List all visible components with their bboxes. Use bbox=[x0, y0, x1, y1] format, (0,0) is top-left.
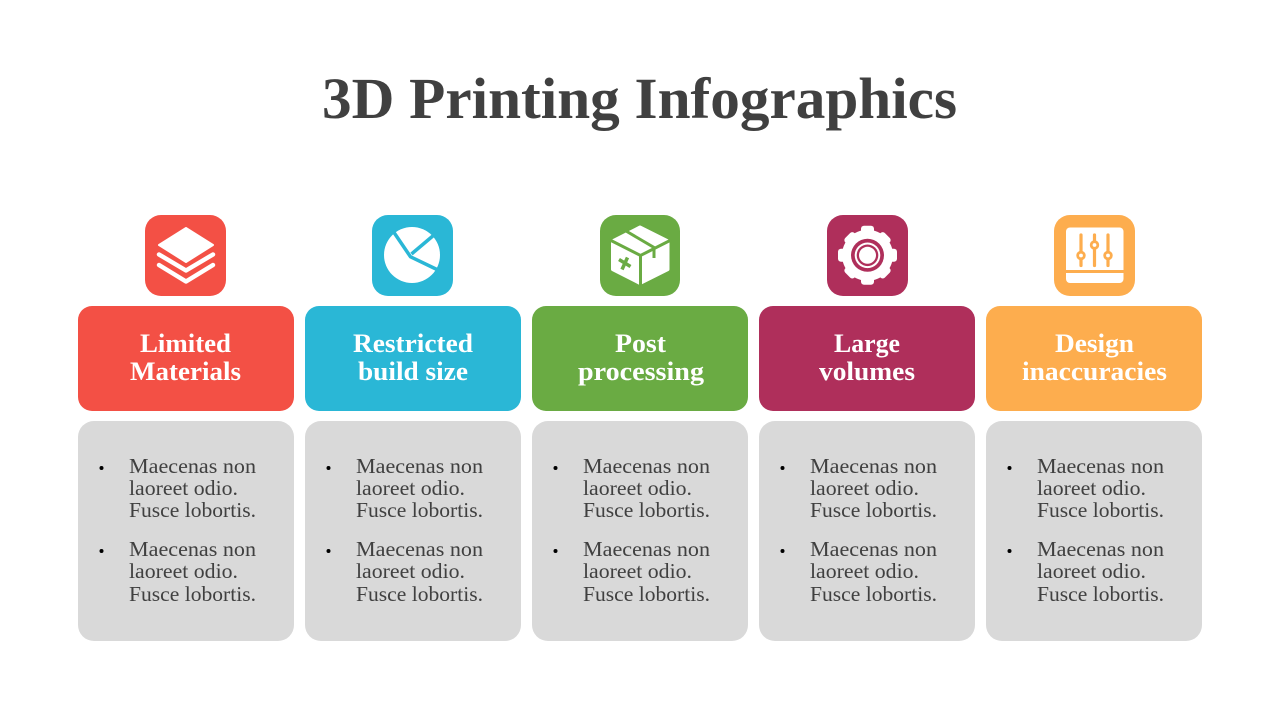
text panel: Limited Materials bbox=[78, 421, 294, 641]
text panel: Post processing: Fusce lobortis. bbox=[583, 582, 710, 606]
heading panel: Design inaccuracies: Design bbox=[1055, 329, 1135, 358]
column: Design inaccuracies bbox=[986, 215, 1202, 641]
heading panel: Restricted build size bbox=[305, 306, 521, 411]
text panel: Limited Materials: Fusce lobortis. bbox=[129, 582, 256, 606]
text panel: Restricted build size: laoreet odio. bbox=[356, 476, 465, 500]
text panel: Post processing: laoreet odio. bbox=[583, 559, 692, 583]
heading panel: Limited Materials bbox=[78, 306, 294, 411]
icon: box bbox=[600, 215, 680, 296]
icon: layers bbox=[145, 215, 226, 296]
heading panel: Design inaccuracies bbox=[986, 306, 1202, 411]
text panel: Design inaccuracies: Maecenas non bbox=[1037, 454, 1165, 478]
column: Post processing bbox=[532, 215, 748, 641]
text panel: Design inaccuracies: Fusce lobortis. bbox=[1037, 582, 1164, 606]
heading panel: Post processing: processing bbox=[578, 357, 704, 386]
text panel: Post processing: Maecenas non bbox=[583, 537, 711, 561]
heading panel: Restricted build size: Restricted bbox=[353, 329, 474, 358]
text panel: Restricted build size bbox=[305, 421, 521, 641]
title: 3D Printing Infographics bbox=[322, 66, 957, 131]
column: Limited Materials bbox=[78, 215, 294, 641]
text panel: Design inaccuracies: Maecenas non bbox=[1037, 537, 1165, 561]
heading panel: Large volumes: volumes bbox=[819, 357, 915, 386]
text panel: Large volumes: Fusce lobortis. bbox=[810, 498, 937, 522]
text panel: Limited Materials: Maecenas non bbox=[129, 537, 257, 561]
text panel: Large volumes: Maecenas non bbox=[810, 537, 938, 561]
icon: pie chart bbox=[372, 215, 453, 296]
text panel: Large volumes: Maecenas non bbox=[810, 454, 938, 478]
heading panel: Large volumes: Large bbox=[834, 329, 900, 358]
column: Large volumes bbox=[759, 215, 975, 641]
text panel: Large volumes: Fusce lobortis. bbox=[810, 582, 937, 606]
text panel: Restricted build size: Maecenas non bbox=[356, 537, 484, 561]
text panel: Restricted build size: laoreet odio. bbox=[356, 559, 465, 583]
text panel: Post processing: Fusce lobortis. bbox=[583, 498, 710, 522]
text panel: Large volumes: laoreet odio. bbox=[810, 476, 919, 500]
text panel: Limited Materials: Fusce lobortis. bbox=[129, 498, 256, 522]
text panel: Post processing bbox=[532, 421, 748, 641]
text panel: Restricted build size: Maecenas non bbox=[356, 454, 484, 478]
text panel: Restricted build size: Fusce lobortis. bbox=[356, 582, 483, 606]
heading panel: Design inaccuracies: inaccuracies bbox=[1022, 357, 1167, 386]
column: Restricted build size bbox=[305, 215, 521, 641]
heading panel: Limited Materials: Limited bbox=[140, 329, 232, 358]
text panel: Limited Materials: laoreet odio. bbox=[129, 559, 238, 583]
icon: gear bbox=[827, 215, 908, 296]
icon: sliders bbox=[1054, 215, 1135, 296]
text panel: Design inaccuracies: laoreet odio. bbox=[1037, 476, 1146, 500]
text panel: Design inaccuracies: Fusce lobortis. bbox=[1037, 498, 1164, 522]
heading panel: Post processing: Post bbox=[615, 329, 666, 358]
text panel: Large volumes: laoreet odio. bbox=[810, 559, 919, 583]
text panel: Restricted build size: Fusce lobortis. bbox=[356, 498, 483, 522]
heading panel: Restricted build size: build size bbox=[358, 357, 468, 386]
text panel: Limited Materials: laoreet odio. bbox=[129, 476, 238, 500]
heading panel: Limited Materials: Materials bbox=[130, 357, 241, 386]
heading panel: Large volumes bbox=[759, 306, 975, 411]
heading panel: Post processing bbox=[532, 306, 748, 411]
text panel: Large volumes bbox=[759, 421, 975, 641]
text panel: Post processing: laoreet odio. bbox=[583, 476, 692, 500]
text panel: Post processing: Maecenas non bbox=[583, 454, 711, 478]
text panel: Limited Materials: Maecenas non bbox=[129, 454, 257, 478]
text panel: Design inaccuracies bbox=[986, 421, 1202, 641]
text panel: Design inaccuracies: laoreet odio. bbox=[1037, 559, 1146, 583]
